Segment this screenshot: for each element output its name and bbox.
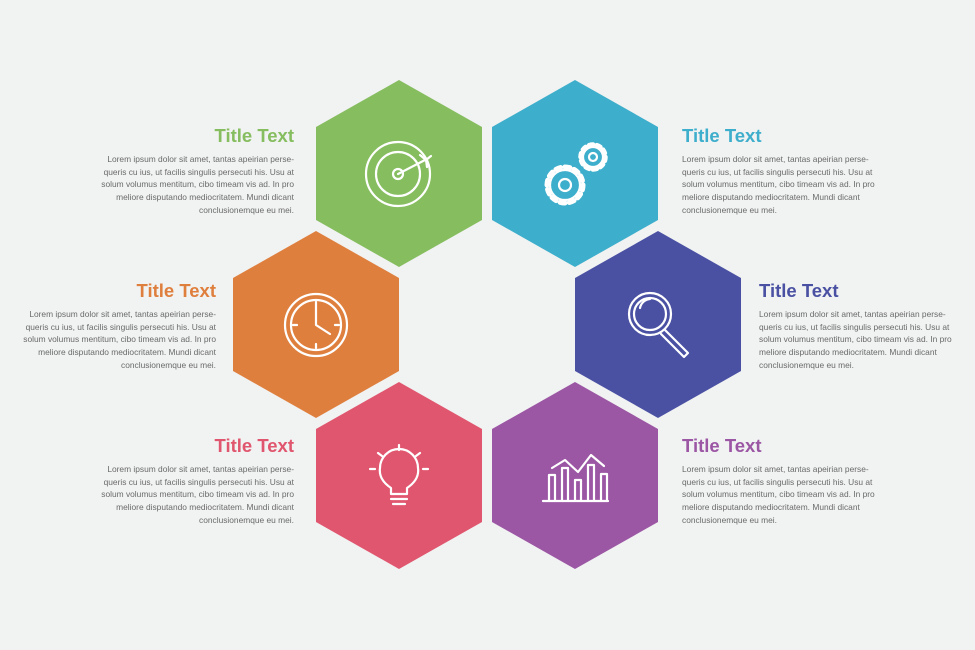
text block: bottom right: solum volumus mentitum, cibo timeam vis ad. In pro	[682, 489, 875, 499]
text block: bottom right	[682, 435, 875, 525]
text block: middle right	[759, 280, 952, 370]
text block: bottom left: queris cu ius, ut facilis singulis persecuti his. Usu at	[104, 477, 295, 487]
text block: top right: queris cu ius, ut facilis singulis persecuti his. Usu at	[682, 167, 873, 177]
icon: clock	[285, 294, 347, 356]
text block: bottom left: meliore disputando mediocritatem. Mundi dicant	[116, 502, 295, 512]
text block: middle right: solum volumus mentitum, cibo timeam vis ad. In pro	[759, 334, 952, 344]
text block: bottom left: solum volumus mentitum, cibo timeam vis ad. In pro	[101, 489, 294, 499]
text block: top left: Title Text	[214, 125, 294, 146]
icon: magnifier	[629, 293, 688, 357]
text block: middle left: Lorem ipsum dolor sit amet, tantas apeirian perse-	[29, 309, 216, 319]
text block: top right: solum volumus mentitum, cibo timeam vis ad. In pro	[682, 179, 875, 189]
text block: middle left: solum volumus mentitum, cibo timeam vis ad. In pro	[23, 334, 216, 344]
text block: bottom right: meliore disputando mediocritatem. Mundi dicant	[682, 502, 860, 512]
text block: middle left: Title Text	[136, 280, 216, 301]
text block: top right	[682, 125, 875, 215]
hexagon: purple chart	[492, 382, 658, 569]
text block: middle right: Lorem ipsum dolor sit amet, tantas apeirian perse-	[759, 309, 946, 319]
hexagon: blue gears	[492, 80, 658, 267]
text block: bottom left: conclusionemque eu mei.	[199, 515, 294, 525]
text block: top right: conclusionemque eu mei.	[682, 205, 777, 215]
hexagon: orange clock	[233, 231, 399, 418]
icon: target	[366, 142, 431, 206]
text block: bottom left: Title Text	[214, 435, 294, 456]
text block: middle right: meliore disputando mediocritatem. Mundi dicant	[759, 347, 937, 357]
text block: middle right: conclusionemque eu mei.	[759, 360, 854, 370]
text block: bottom right: Title Text	[682, 435, 762, 456]
icon: gears	[547, 144, 606, 203]
text block: top right: meliore disputando mediocritatem. Mundi dicant	[682, 192, 860, 202]
text block: bottom left	[101, 435, 295, 525]
text block: top left: Lorem ipsum dolor sit amet, tantas apeirian perse-	[107, 154, 294, 164]
text block: top left: meliore disputando mediocritatem. Mundi dicant	[116, 192, 295, 202]
icon: bar chart	[543, 455, 608, 501]
text block: top left	[101, 125, 295, 215]
icon: bulb	[370, 445, 428, 504]
hexagon: pink bulb	[316, 382, 482, 569]
text block: top right: Title Text	[682, 125, 762, 146]
text block: bottom left: Lorem ipsum dolor sit amet, tantas apeirian perse-	[107, 464, 294, 474]
text block: bottom right: Lorem ipsum dolor sit amet, tantas apeirian perse-	[682, 464, 869, 474]
hexagon: green target	[316, 80, 482, 267]
text block: middle left: conclusionemque eu mei.	[121, 360, 216, 370]
text block: top left: solum volumus mentitum, cibo timeam vis ad. In pro	[101, 179, 294, 189]
text block: middle left: queris cu ius, ut facilis singulis persecuti his. Usu at	[26, 322, 217, 332]
text block: middle left: meliore disputando mediocritatem. Mundi dicant	[38, 347, 217, 357]
text block: top right: Lorem ipsum dolor sit amet, tantas apeirian perse-	[682, 154, 869, 164]
text block: middle right: Title Text	[759, 280, 839, 301]
text block: bottom right: queris cu ius, ut facilis singulis persecuti his. Usu at	[682, 477, 873, 487]
text block: top left: queris cu ius, ut facilis singulis persecuti his. Usu at	[104, 167, 295, 177]
hexagon: navy magnifier	[575, 231, 741, 418]
text block: middle right: queris cu ius, ut facilis singulis persecuti his. Usu at	[759, 322, 950, 332]
text block: top left: conclusionemque eu mei.	[199, 205, 294, 215]
text block: bottom right: conclusionemque eu mei.	[682, 515, 777, 525]
text block: middle left	[23, 280, 217, 370]
